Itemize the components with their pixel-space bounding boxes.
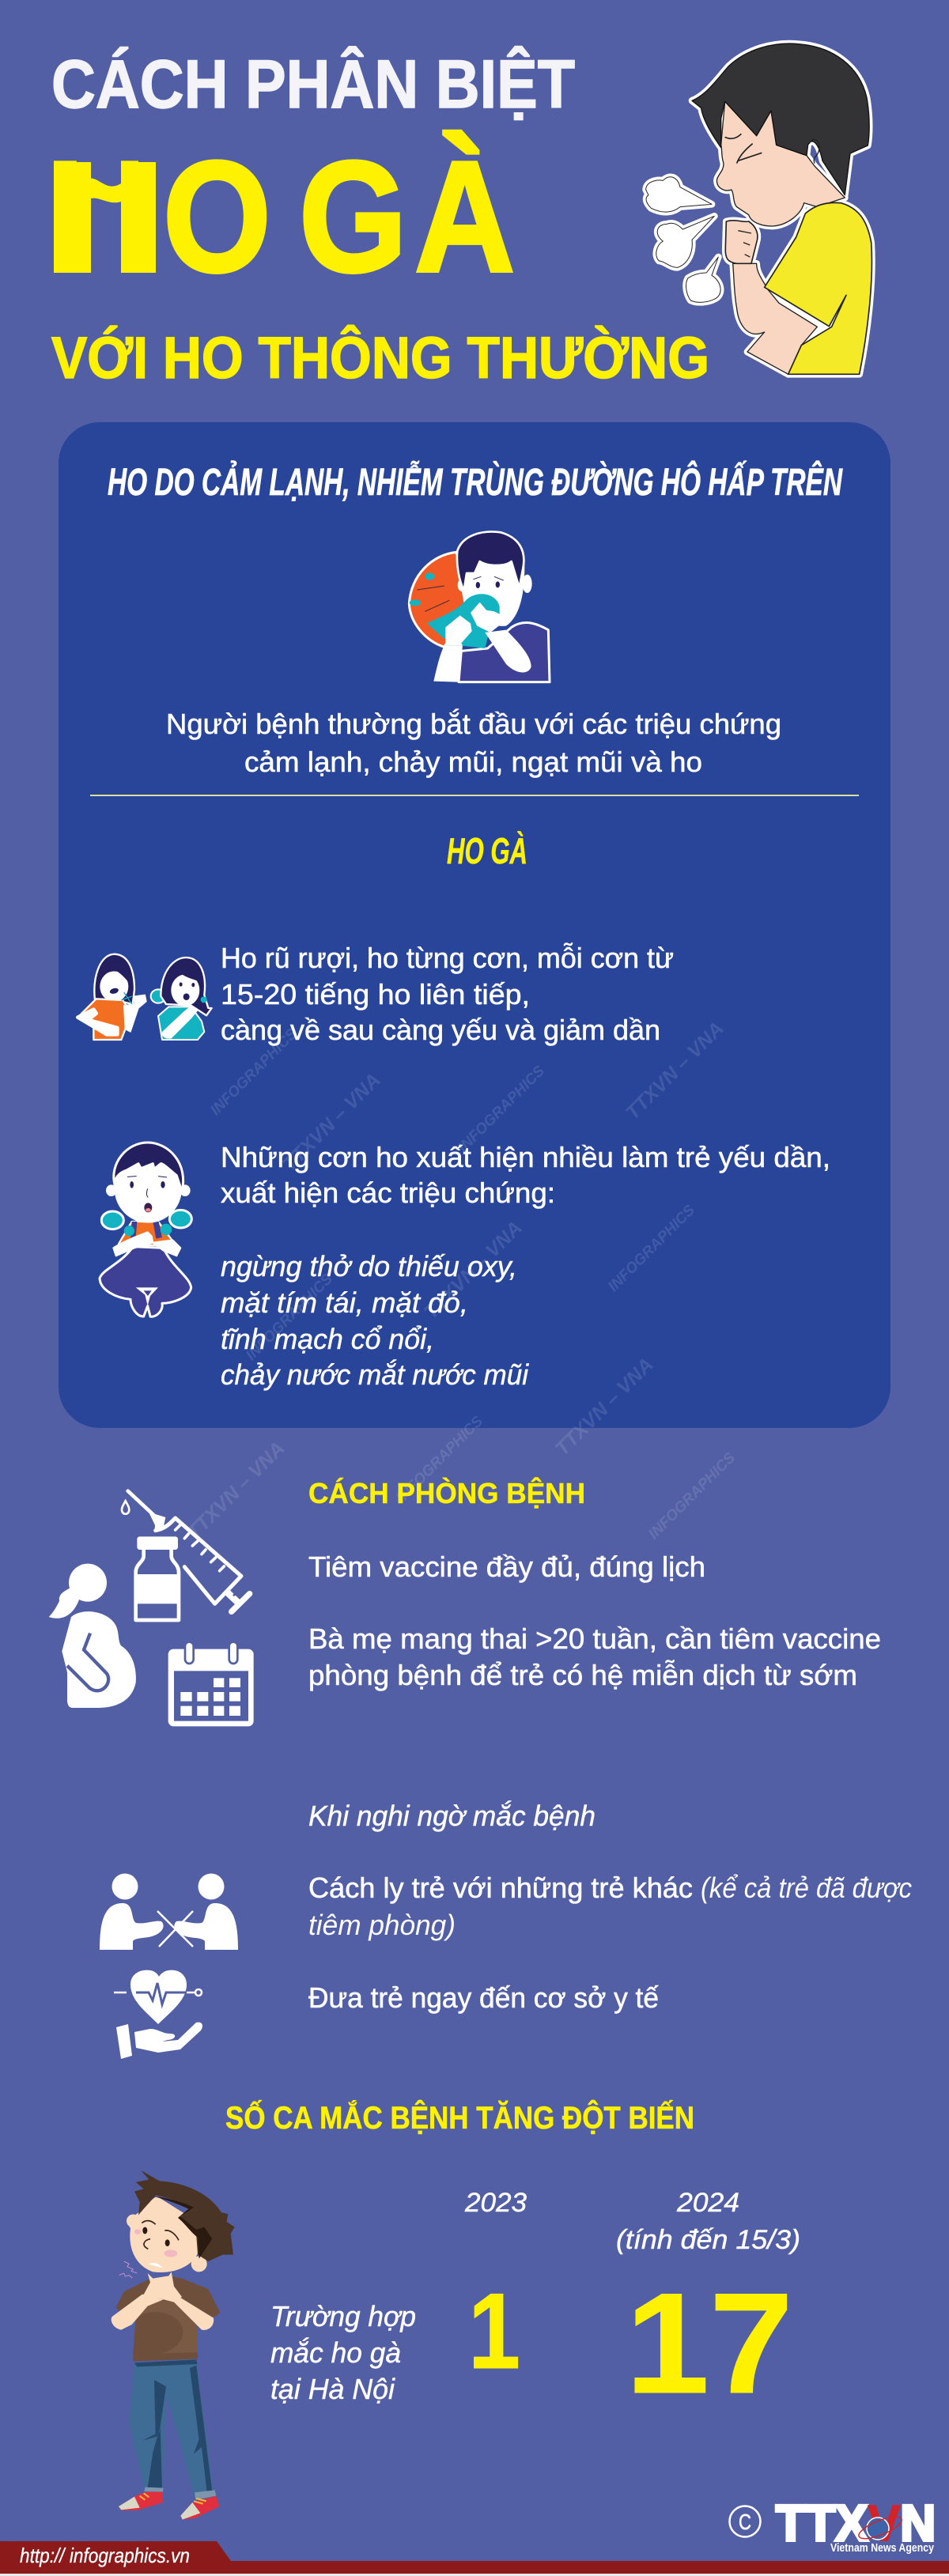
icon: boy holding sore throat: [112, 2170, 235, 2520]
text: take to clinic: Đưa trẻ ngay đến cơ sở y tế: [308, 1981, 659, 2014]
title: [46, 47, 709, 391]
footer bar: http:// infographics.vn: [20, 2544, 190, 2567]
icon: sick boy with handkerchief: [409, 531, 550, 682]
text: cold cough description: Người bệnh thường bắt đầu với các triệu chứng: [166, 708, 781, 740]
text: whooping cough symptom 1: càng về sau càng yếu và giảm dần: [221, 1014, 660, 1046]
text: isolate: tiêm phòng): [308, 1909, 456, 1941]
text: prevention steps: Tiêm vaccine đầy đủ, đúng lịch: [308, 1551, 705, 1583]
infographic page: TTXVN – VNA: [278, 1069, 385, 1176]
title: VỚI HO THÔNG THƯỜNG: [51, 325, 709, 391]
text: whooping cough symptom 2: mặt tím tái, mặt đỏ,: [221, 1286, 468, 1319]
text: whooping cough symptom 2: tĩnh mạch cổ nổi,: [221, 1323, 434, 1355]
stat column: 2023: [464, 2188, 527, 2391]
text: cold cough description: cảm lạnh, chảy mũi, ngạt mũi và ho: [244, 746, 702, 778]
text: isolate: (kể cả trẻ đã được: [701, 1872, 912, 1904]
label: cases in Hanoi: tại Hà Nội: [270, 2373, 395, 2405]
text: prevention steps: phòng bệnh để trẻ có hệ miễn dịch từ sớm: [308, 1659, 857, 1691]
stat column: 2024: 2024: [676, 2188, 739, 2218]
icon: isolate children: [100, 1874, 238, 1950]
text: isolate: [308, 1872, 912, 1941]
text: isolate: Cách ly trẻ với những trẻ khác: [308, 1872, 693, 1904]
blue panel: [59, 422, 890, 1428]
stat column: 2023: 1: [468, 2271, 520, 2391]
title: HO GÀ: [46, 127, 515, 304]
stat column: 2024: [616, 2188, 800, 2423]
label: cases in Hanoi: [270, 2300, 416, 2405]
label: cases in Hanoi: mắc ho gà: [270, 2336, 401, 2369]
icon: heart in hand: [114, 1970, 202, 2059]
text: cold cough description: [166, 708, 781, 778]
icon: two coughing girls: [78, 954, 212, 1040]
text: whooping cough symptom 2: xuất hiện các triệu chứng:: [221, 1177, 555, 1209]
infographic page: TTXVN – VNA: [183, 1437, 289, 1544]
infographic page: TTXVN – VNA: [622, 1018, 728, 1124]
text: prevention steps: [308, 1551, 881, 1691]
stat column: 2023: 2023: [464, 2188, 527, 2218]
stat column: 2024: (tính đến 15/3): [616, 2225, 800, 2255]
text: whooping cough symptom 1: [221, 942, 674, 1046]
text: whooping cough symptom 2: ngừng thở do thiếu oxy,: [221, 1250, 517, 1282]
text: whooping cough symptom 2: chảy nước mắt nước mũi: [221, 1358, 529, 1391]
icon: coughing boy: [646, 43, 871, 374]
text: whooping cough symptom 2: Những cơn ho xuất hiện nhiều làm trẻ yếu dần,: [221, 1141, 830, 1173]
title: CÁCH PHÂN BIỆT: [51, 47, 575, 123]
heading: whooping cough: HO GÀ: [447, 830, 527, 871]
heading: prevention: CÁCH PHÒNG BỆNH: [308, 1476, 585, 1509]
infographic page: INFOGRAPHICS: [645, 1449, 739, 1543]
text: whooping cough symptom 1: 15-20 tiếng ho liên tiếp,: [221, 978, 530, 1010]
text: whooping cough symptom 2: [221, 1141, 830, 1391]
stat column: 2024: 17: [626, 2264, 793, 2423]
icon: coughing child: [100, 1143, 191, 1316]
infographic page: INFOGRAPHICS: [393, 1413, 486, 1506]
footer bar: [0, 2541, 949, 2576]
infographic page: INFOGRAPHICS: [605, 1202, 698, 1295]
text: when suspected: Khi nghi ngờ mắc bệnh: [308, 1800, 595, 1832]
infographic page: INFOGRAPHICS: [455, 1063, 548, 1156]
infographic page: TTXVN – VNA: [551, 1354, 658, 1460]
heading: surge in cases: SỐ CA MẮC BỆNH TĂNG ĐỘT BIẾN: [225, 2099, 694, 2136]
infographic page: TTXVN – VNA: [420, 1217, 527, 1324]
text: prevention steps: Bà mẹ mang thai >20 tuần, cần tiêm vaccine: [308, 1622, 881, 1655]
text: whooping cough symptom 1: Ho rũ rượi, ho từng cơn, mỗi cơn từ: [221, 942, 674, 974]
icon: vaccine, pregnant woman, calendar: [49, 1491, 254, 1726]
infographic page: INFOGRAPHICS: [243, 1271, 336, 1364]
logo: TTXVN: TTXVN: [776, 2495, 936, 2551]
label: cases in Hanoi: Trường hợp: [270, 2300, 416, 2332]
logo: TTXVN: C: [739, 2510, 751, 2534]
infographic page: INFOGRAPHICS: [207, 1025, 301, 1119]
